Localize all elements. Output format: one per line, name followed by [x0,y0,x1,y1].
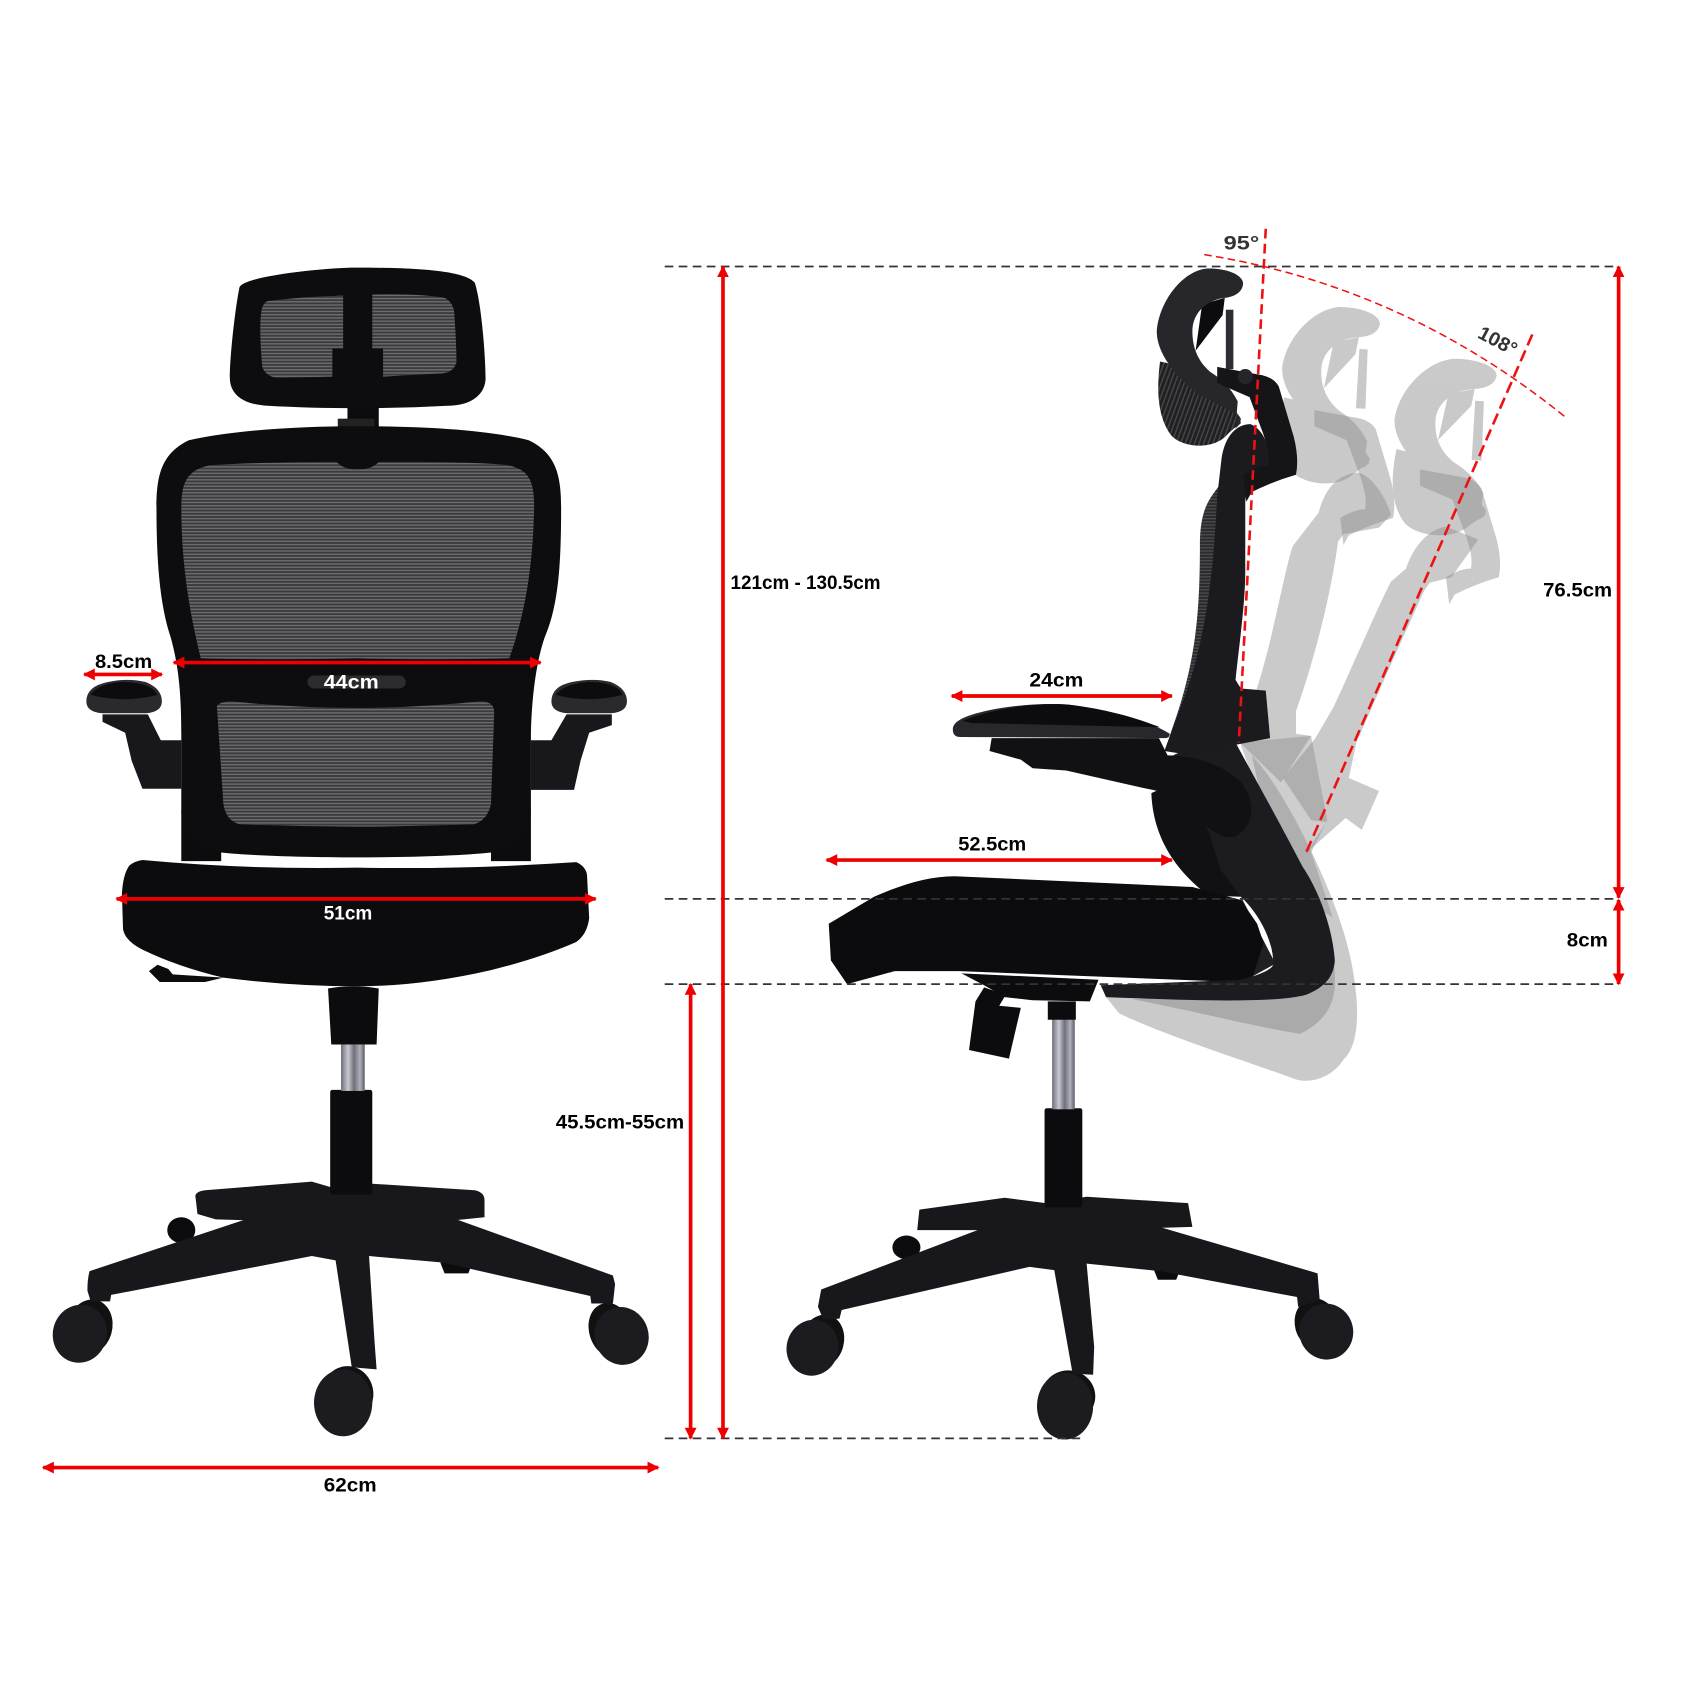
side armrest pad [953,704,1170,738]
label: 76.5cm: 76.5cm [1543,580,1612,602]
ghost backrest position 2 [1283,527,1478,854]
side mesh strip [1165,486,1219,749]
side caster right [1289,1293,1360,1366]
side seat cushion [829,876,1264,984]
arrow: seat thickness [1617,900,1620,984]
side armrest arm [990,738,1251,837]
ghost headrest position 2 [1388,356,1498,537]
label: 95 degrees: 95° [1224,232,1259,254]
label: 24cm: 24cm [1029,669,1083,691]
front caster left [46,1294,119,1369]
side caster centre [1037,1370,1095,1439]
arrow: 24cm armrest length [952,694,1172,698]
label: 45.5cm-55cm: 45.5cm-55cm [556,1112,684,1134]
panel: front view chair [46,268,656,1436]
side frame [1101,745,1335,1000]
front backrest frame [156,426,561,857]
front base legs [87,1189,615,1369]
side piston collar [1048,1001,1076,1020]
front base rear legs [195,1182,485,1225]
label: 8cm: 8cm [1567,929,1608,951]
arrow: seat height [689,984,692,1438]
arrow: 51cm seat width [117,897,596,901]
label: 8.5cm: 8.5cm [95,651,152,673]
front headrest [230,268,486,408]
front chrome piston [341,1045,365,1091]
ghost swing frame lower [1106,755,1357,1081]
ghost backrest position 1 [1240,473,1391,782]
front right armrest [531,680,627,790]
arrow: 8.5cm armrest width [84,673,162,676]
label: 52.5cm: 52.5cm [958,833,1026,855]
side base rear legs [917,1197,1192,1230]
arrow: 52.5cm seat depth [827,858,1172,862]
side headrest pad [1157,269,1243,428]
front seat lever [149,965,223,982]
front hidden casters [167,1217,473,1273]
label: 44cm: 44cm [324,671,379,693]
side base legs [818,1204,1320,1375]
side frame pad [1151,777,1252,897]
height guide lines [665,267,1619,1438]
side seat mechanism [961,973,1099,1001]
front caster right [582,1297,656,1372]
ghost headrest position 1 [1276,304,1381,486]
front column sleeve [328,986,379,1045]
arrow: 44cm back width [174,661,541,664]
side headrest bracket [1217,367,1297,502]
front lumbar slot [308,676,406,688]
front left armrest [86,680,181,789]
side backrest [1164,424,1270,755]
ghost bracket position 1 [1314,410,1394,545]
arrow: total height [721,267,725,1438]
label: 51cm: 51cm [324,902,372,924]
front upper mesh [181,462,534,659]
side frame filler [1241,897,1275,980]
front neck bracket [338,406,379,428]
side gas column [1045,1108,1082,1207]
panel: reclined ghost positions [1106,304,1500,1081]
side caster left [780,1310,850,1382]
ghost hinge area [1240,736,1333,917]
ghost bracket position 2 [1420,469,1500,604]
ghost swing frame inner [1133,799,1335,1034]
front gas lift column [330,1090,372,1195]
label: 121cm - 130.5cm: 121cm - 130.5cm [731,572,881,594]
label: 62cm: 62cm [324,1474,377,1496]
front back supports [181,809,531,861]
front seat cushion [122,860,589,986]
side headrest mesh [1158,361,1241,446]
label: 108 degrees: 108° [1474,322,1521,361]
side tilt knob [969,987,1021,1059]
arrow: 62cm base width [43,1466,658,1469]
arrow: back height [1617,267,1620,898]
panel: side view chair [780,269,1360,1439]
side headrest post [1196,298,1233,369]
side chrome piston [1052,1019,1075,1109]
side hidden casters [892,1236,1181,1280]
front lower mesh [217,701,494,827]
front caster centre [314,1366,373,1436]
recline angle lines [1204,229,1565,854]
